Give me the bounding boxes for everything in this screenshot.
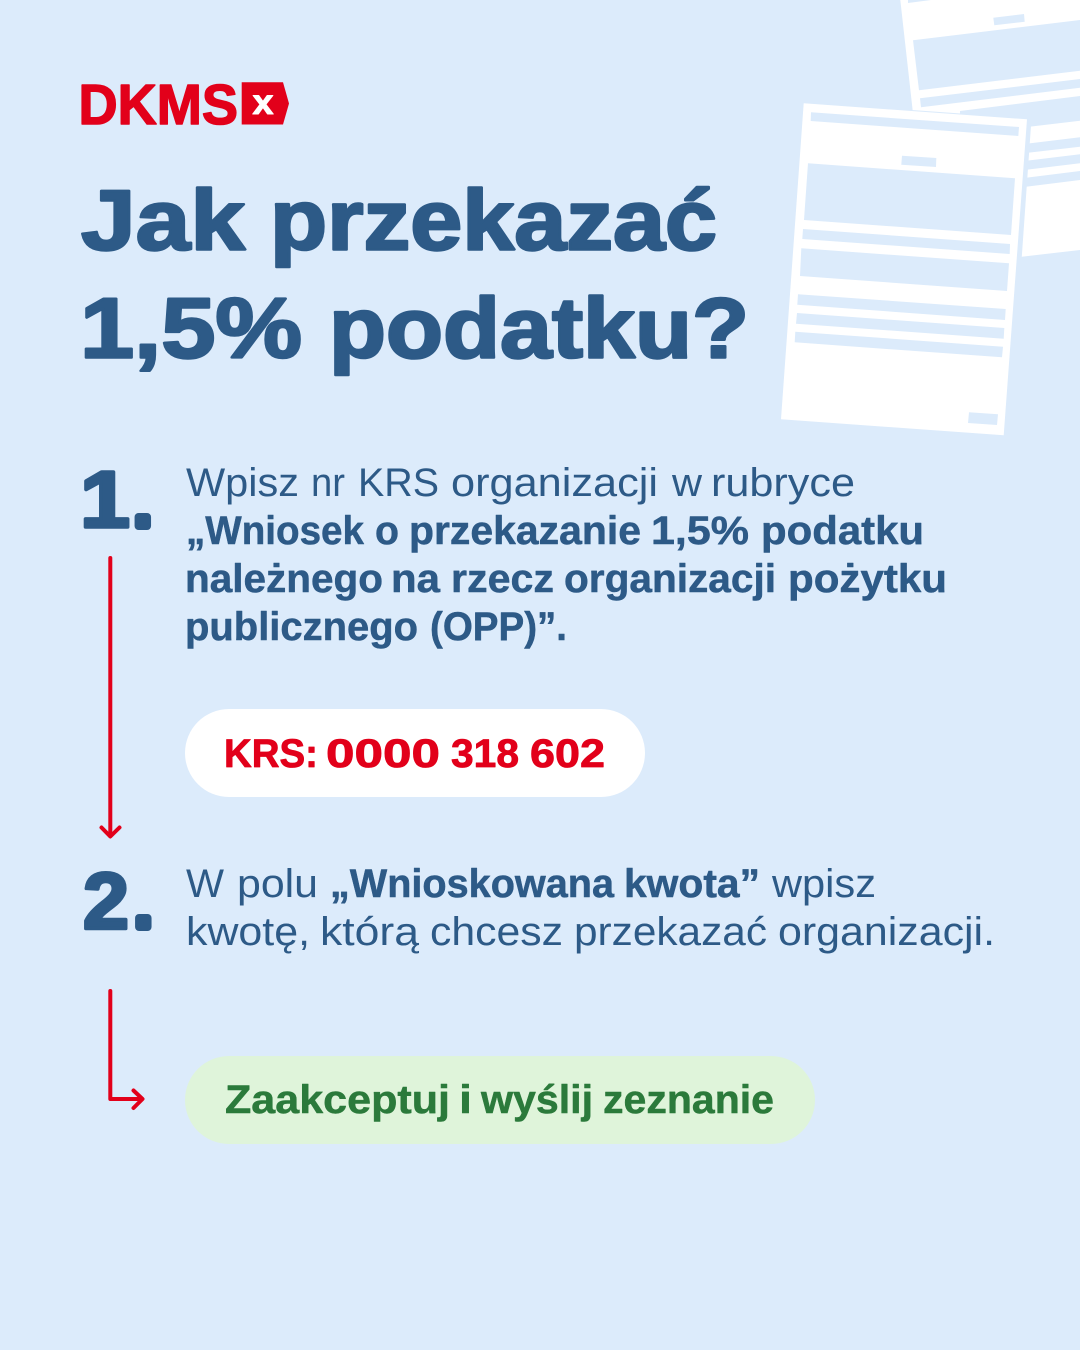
KRS pill: 0000 xyxy=(326,732,440,776)
confirm pill: Zaakceptuj xyxy=(225,1078,450,1122)
step 1 number xyxy=(80,455,151,544)
logo: DKMS: DKMS xyxy=(78,73,238,137)
step 1 text: rubryce xyxy=(711,461,855,505)
step 1 text: „Wniosek xyxy=(186,509,365,553)
step 2 text: kwotę, xyxy=(186,910,310,954)
step 1 text: nr xyxy=(311,461,345,505)
step 1 text: publicznego xyxy=(185,605,418,649)
title: 1,5% xyxy=(80,282,302,376)
KRS pill xyxy=(185,709,645,797)
arrow: step 1 to step 2 xyxy=(102,558,120,836)
step 2 text: organizacji. xyxy=(778,910,995,954)
step 1 text: Wpisz xyxy=(186,461,299,505)
step 1 text xyxy=(185,461,947,649)
step 1 text: przekazanie xyxy=(409,509,641,553)
step 1 text: organizacji xyxy=(451,461,658,505)
step 1 text: należnego xyxy=(185,557,383,601)
title: Jak xyxy=(81,174,246,268)
KRS pill: 318 xyxy=(451,732,519,776)
confirm pill: wyślij xyxy=(480,1078,593,1122)
step 2 text: wpisz xyxy=(771,862,876,906)
step 2 number: 2 xyxy=(83,856,129,946)
step 2 number: . xyxy=(135,873,152,940)
title xyxy=(80,174,749,376)
step 2 text: chcesz xyxy=(430,910,563,954)
title: przekazać xyxy=(270,174,717,268)
step 1 text: na xyxy=(391,557,441,601)
step 2 text: W xyxy=(186,862,224,906)
step 1 text: podatku xyxy=(761,509,924,553)
step 2 text: polu xyxy=(237,862,318,906)
confirm pill: i xyxy=(459,1078,472,1122)
step 2 text: kwota” xyxy=(624,862,760,906)
step 1 text: rzecz xyxy=(451,557,554,601)
step 2 text: którą xyxy=(320,910,420,954)
confirm pill: zeznanie xyxy=(603,1078,774,1122)
step 1 text: (OPP)”. xyxy=(430,605,567,649)
step 1 text: pożytku xyxy=(788,557,947,601)
step 1 text: o xyxy=(375,509,399,553)
step 2 text: przekazać xyxy=(574,910,767,954)
KRS pill: KRS: xyxy=(224,732,318,776)
step 1 text: KRS xyxy=(358,461,439,505)
confirm pill xyxy=(185,1056,815,1144)
icon: front document xyxy=(781,103,1027,435)
step 1 text: w xyxy=(671,461,702,505)
step 1 number: 1 xyxy=(80,455,130,544)
KRS pill: 602 xyxy=(530,732,605,776)
step 1 text: organizacji xyxy=(564,557,776,601)
step 2 number xyxy=(83,856,152,946)
step 2 text xyxy=(186,862,995,954)
step 2 text: „Wnioskowana xyxy=(330,862,615,906)
step 1 number: . xyxy=(134,472,151,539)
step 1 text: 1,5% xyxy=(651,509,749,553)
title: podatku? xyxy=(329,282,749,376)
arrow: step 2 to confirm xyxy=(110,991,142,1108)
icon: back document xyxy=(803,0,1080,265)
logo: DKMS: x xyxy=(252,83,274,122)
